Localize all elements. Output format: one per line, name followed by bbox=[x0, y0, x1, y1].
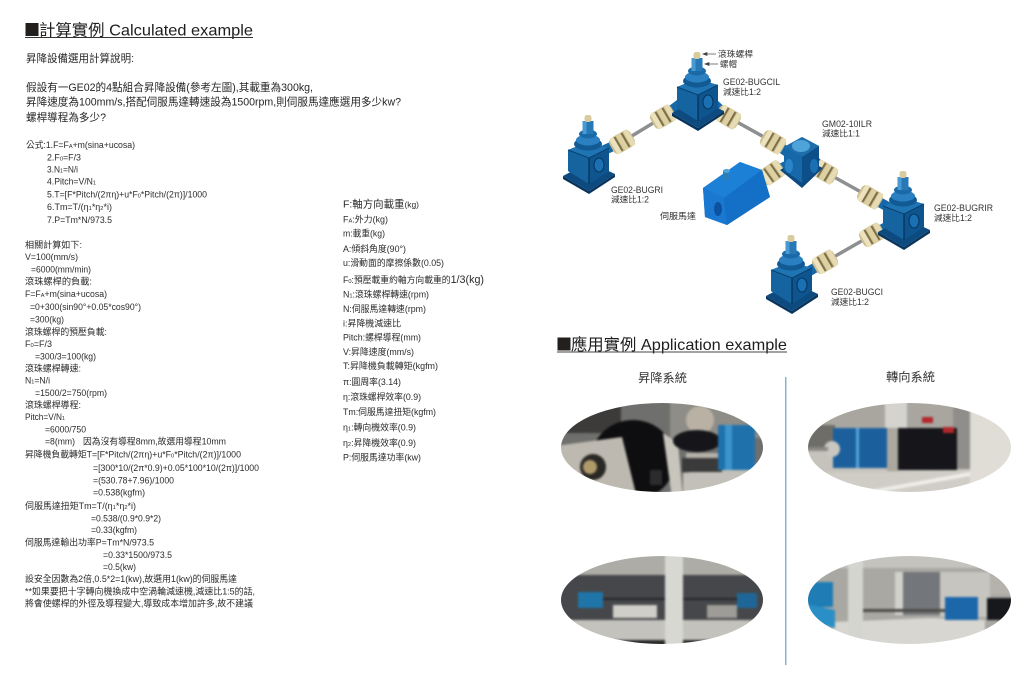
callouts: ball screw and nut arrows bbox=[703, 52, 718, 66]
text block: related calculations: **如果要把十字轉向機換成中空渦輪減速機,減速比1:5的話, bbox=[25, 586, 255, 596]
photo: steering system overview bbox=[808, 556, 1011, 644]
text block: related calculations: =0.538(kgfm) bbox=[93, 488, 145, 498]
text block: symbol legend: FA:外力(kg) bbox=[343, 214, 388, 224]
diagram: four-point lifting system bbox=[563, 52, 930, 314]
text block: related calculations: F=FA+m(sina+ucosa) bbox=[25, 289, 107, 299]
text block: symbol legend: η1:轉向機效率(0.9) bbox=[343, 422, 416, 432]
diagram labels bbox=[611, 48, 993, 307]
text block: symbol legend: η2:昇降機效率(0.9) bbox=[343, 437, 416, 448]
text block: related calculations: =6000/750 bbox=[45, 424, 86, 434]
diagram labels: 伺服馬達 bbox=[660, 210, 696, 221]
photo: lifting system overview bbox=[561, 556, 763, 644]
text block: related calculations: =0.5(kw) bbox=[103, 562, 136, 572]
diagram labels: GE02-BUGRI bbox=[611, 185, 663, 195]
text block: formulas bbox=[26, 139, 207, 225]
text block: related calculations bbox=[25, 239, 259, 608]
text block: symbol legend bbox=[343, 198, 484, 462]
gearbox side ports bbox=[600, 104, 890, 273]
diagram labels: GE02-BUGCI bbox=[831, 287, 883, 297]
text block: related calculations: 滾珠螺桿轉速: bbox=[25, 362, 81, 374]
text block: related calculations: 昇降機負載轉矩T=[F*Pitch/(2πη)+u*F0*Pitch/(2π)]/1000 bbox=[25, 448, 241, 460]
text block: related calculations: =300/3=100(kg) bbox=[35, 352, 96, 362]
text block: related calculations: Pitch=V/N1 bbox=[25, 412, 65, 422]
diagram labels: 減速比1:1 bbox=[822, 128, 860, 138]
photo: steering system close-up bbox=[808, 403, 1011, 492]
heading: application example: 應用實例 Application example bbox=[571, 335, 787, 354]
text block: problem statement: 螺桿導程為多少? bbox=[26, 111, 106, 124]
photo: lifting system close-up bbox=[561, 403, 763, 492]
text block: problem statement bbox=[26, 52, 401, 124]
text block: problem statement: 假設有一GE02的4點組合昇降設備(參考左圖),其載重為300kg, bbox=[26, 81, 313, 94]
text block: related calculations: =1500/2=750(rpm) bbox=[35, 388, 107, 398]
diagram labels: GE02-BUGRIR bbox=[934, 203, 993, 213]
diagram labels: GE02-BUGCIL bbox=[723, 77, 780, 87]
text block: symbol legend: F0:預壓載重約軸方向載重的1/3(kg) bbox=[343, 274, 484, 286]
diagram labels: 減速比1:2 bbox=[831, 296, 869, 307]
text block: related calculations: =0.538/(0.9*0.9*2) bbox=[91, 514, 161, 524]
text block: related calculations: 伺服馬達扭矩Tm=T/(η1*η2*i) bbox=[25, 500, 136, 511]
text block: problem statement: 昇降速度為100mm/s,搭配伺服馬達轉速設為1500rpm,則伺服馬達應選用多少kw? bbox=[26, 96, 401, 108]
text block: related calculations: 相關計算如下: bbox=[25, 239, 82, 250]
text block: related calculations: =[300*10/(2π*0.9)+0.05*100*10/(2π)]/1000 bbox=[93, 463, 259, 473]
diagram labels: 滾珠螺桿 bbox=[718, 48, 753, 59]
text block: symbol legend: P:伺服馬達功率(kw) bbox=[343, 452, 421, 462]
text block: related calculations: 因為沒有導程8mm,故選用導程10mm bbox=[83, 436, 226, 446]
shafts bbox=[622, 117, 872, 262]
text block: symbol legend: i:昇降機減速比 bbox=[343, 318, 401, 328]
text block: related calculations: 將會使螺桿的外徑及導程變大,導致成本增加許多,故不建議 bbox=[25, 598, 253, 608]
text block: formulas: 2.F0=F/3 bbox=[47, 152, 81, 162]
text block: related calculations: =8(mm) bbox=[45, 436, 75, 446]
diagram labels: GM02-10ILR bbox=[822, 119, 872, 129]
diagram labels: 減速比1:2 bbox=[611, 194, 649, 204]
text block: related calculations: =0.33(kgfm) bbox=[91, 525, 137, 535]
text block: formulas: 6.Tm=T/(η1*η2*i) bbox=[47, 202, 112, 212]
text block: symbol legend: η:滾珠螺桿效率(0.9) bbox=[343, 391, 421, 402]
diagram labels: 減速比1:2 bbox=[723, 86, 761, 97]
text block: related calculations: 滾珠螺桿導程: bbox=[25, 399, 81, 410]
heading: calculated example: 計算實例 Calculated example bbox=[39, 20, 253, 40]
text block: symbol legend: N1:滾珠螺桿轉速(rpm) bbox=[343, 288, 429, 300]
gearbox: GM02-10ILR bbox=[780, 137, 823, 188]
text block: related calculations: =(530.78+7.96)/1000 bbox=[93, 476, 174, 486]
text block: symbol legend: V:昇降速度(mm/s) bbox=[343, 346, 414, 357]
text block: symbol legend: N:伺服馬達轉速(rpm) bbox=[343, 303, 426, 314]
diagram labels: 螺帽 bbox=[720, 58, 737, 69]
text block: formulas: 公式:1.F=FA+m(sina+ucosa) bbox=[26, 139, 135, 150]
text block: related calculations: 滾珠螺桿的負載: bbox=[25, 276, 92, 286]
text block: symbol legend: u:滑動面的摩擦係數(0.05) bbox=[343, 257, 444, 268]
servo motor bbox=[703, 162, 770, 225]
text block: related calculations: =0.33*1500/973.5 bbox=[103, 550, 172, 560]
text block: related calculations: 滾珠螺桿的預壓負載: bbox=[25, 326, 107, 337]
text block: related calculations: N1=N/i bbox=[25, 376, 50, 386]
text block: related calculations: =300(kg) bbox=[30, 314, 64, 324]
text block: symbol legend: Tm:伺服馬達扭矩(kgfm) bbox=[343, 406, 436, 417]
text block: symbol legend: π:圓周率(3.14) bbox=[343, 376, 401, 387]
column title: lifting system: 昇降系統 bbox=[638, 371, 687, 385]
text block: related calculations: =6000(mm/min) bbox=[31, 264, 91, 274]
gearbox: GE02-BUGCIL bbox=[672, 52, 724, 131]
text block: formulas: 3.N1=N/i bbox=[47, 164, 78, 174]
text block: formulas: 4.Pitch=V/N1 bbox=[47, 176, 96, 186]
diagram labels: 減速比1:2 bbox=[934, 212, 972, 223]
text block: related calculations: 設安全因數為2倍,0.5*2=1(kw),故選用1(kw)的伺服馬達 bbox=[25, 573, 237, 584]
column title: steering system: 轉向系統 bbox=[886, 369, 935, 384]
text block: related calculations: 伺服馬達輸出功率P=Tm*N/973.5 bbox=[25, 536, 154, 548]
text block: related calculations: =0+300(sin90°+0.05*cos90°) bbox=[30, 302, 141, 312]
couplings bbox=[607, 103, 887, 276]
text block: symbol legend: A:傾斜角度(90°) bbox=[343, 243, 406, 254]
gearbox: GE02-BUGRI bbox=[563, 115, 615, 194]
gearbox: GE02-BUGRIR bbox=[878, 171, 930, 250]
text block: formulas: 5.T=[F*Pitch/(2πη)+u*F0*Pitch/(2π)]/1000 bbox=[47, 190, 207, 200]
text block: problem statement: 昇降設備選用計算說明: bbox=[26, 52, 134, 65]
text block: symbol legend: T:昇降機負載轉矩(kgfm) bbox=[343, 360, 438, 371]
text block: related calculations: F0=F/3 bbox=[25, 339, 52, 349]
text block: related calculations: V=100(mm/s) bbox=[25, 252, 78, 262]
text block: formulas: 7.P=Tm*N/973.5 bbox=[47, 215, 112, 225]
text block: symbol legend: F:軸方向載重(kg) bbox=[343, 198, 419, 210]
gearbox: GE02-BUGCI bbox=[766, 235, 818, 314]
text block: symbol legend: m:載重(kg) bbox=[343, 228, 385, 238]
text block: symbol legend: Pitch:螺桿導程(mm) bbox=[343, 332, 421, 342]
